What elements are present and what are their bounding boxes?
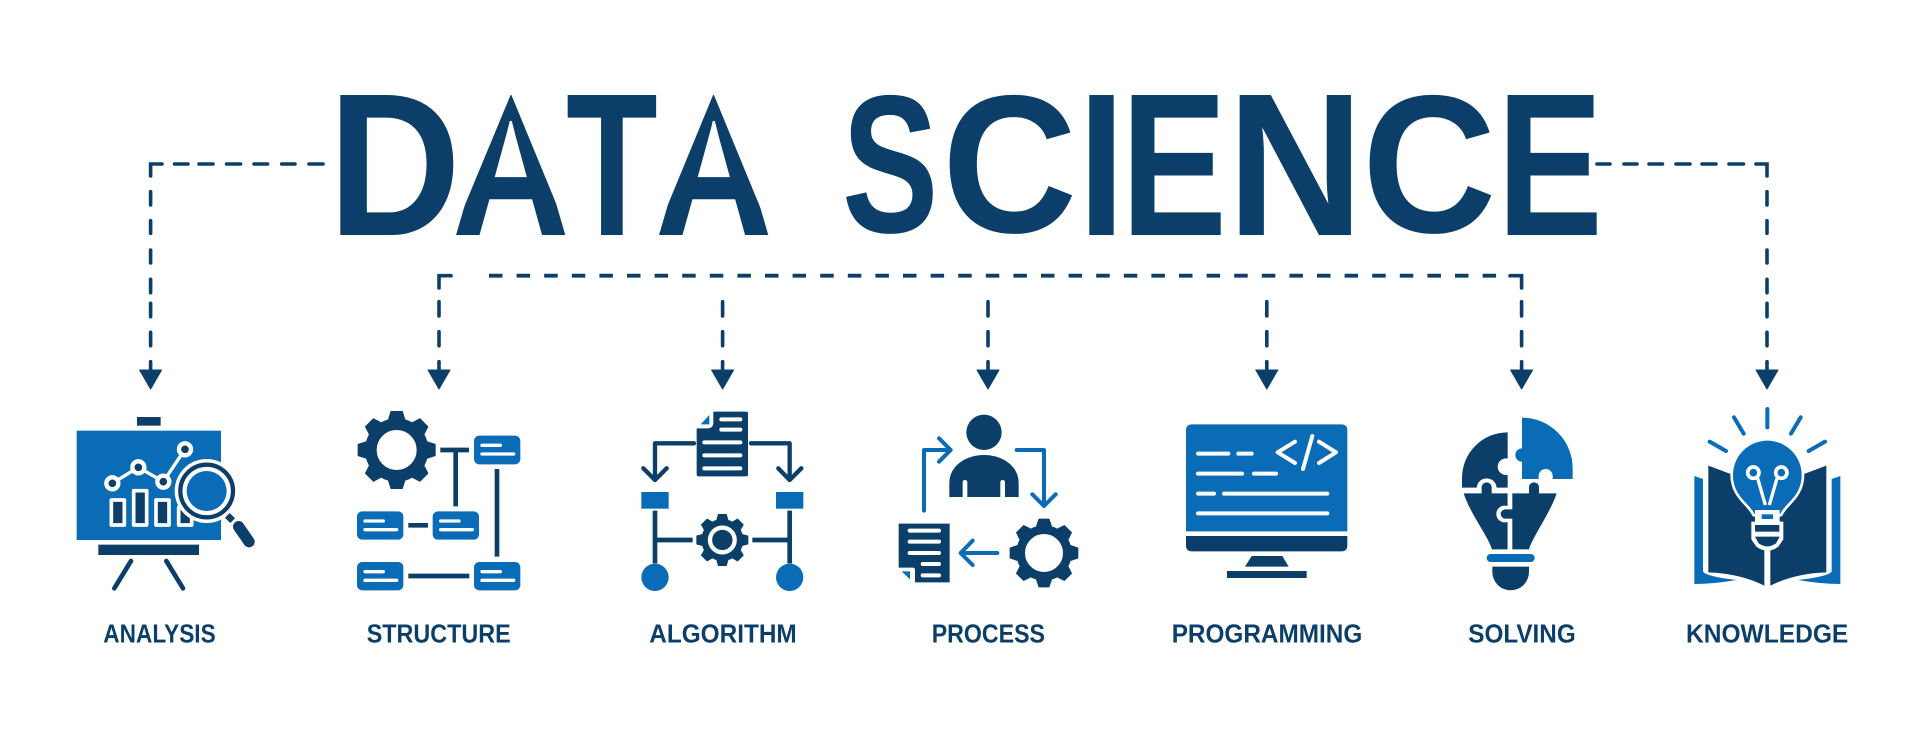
arrow: to solving bbox=[1510, 276, 1533, 389]
label: process: PROCESS bbox=[932, 618, 1045, 648]
arrow: title to knowledge bbox=[1597, 164, 1778, 389]
dashed horizontal bus bbox=[489, 274, 1500, 278]
label: structure: STRUCTURE bbox=[367, 618, 511, 648]
arrow: title to analysis bbox=[140, 164, 323, 389]
title: D bbox=[328, 52, 461, 279]
icon: solving bbox=[1462, 418, 1573, 590]
arrow: to programming bbox=[1256, 302, 1278, 389]
title: N bbox=[1227, 52, 1364, 279]
label: analysis: ANALYSIS bbox=[103, 618, 216, 648]
icon: algorithm bbox=[641, 412, 803, 591]
arrow: to algorithm bbox=[712, 302, 734, 389]
title: A bbox=[452, 52, 570, 279]
title: I bbox=[1078, 52, 1125, 279]
title: C bbox=[1362, 56, 1496, 275]
title: E bbox=[1121, 52, 1227, 279]
title: A bbox=[655, 52, 773, 279]
title bbox=[328, 52, 1603, 279]
arrow: dashed bus to structure bbox=[428, 276, 451, 389]
icon: structure bbox=[357, 411, 520, 590]
label: algorithm: ALGORITHM bbox=[649, 618, 797, 648]
title: S bbox=[842, 56, 939, 275]
label: solving: SOLVING bbox=[1468, 618, 1576, 648]
title: T bbox=[566, 52, 658, 279]
icon: knowledge bbox=[1694, 409, 1840, 587]
title: E bbox=[1497, 52, 1603, 279]
icon: programming bbox=[1186, 424, 1347, 578]
label: knowledge: KNOWLEDGE bbox=[1686, 618, 1848, 648]
icon: process bbox=[899, 415, 1078, 587]
arrow: to process bbox=[977, 302, 999, 389]
label: programming: PROGRAMMING bbox=[1172, 618, 1362, 648]
icon: analysis bbox=[77, 417, 249, 588]
title: C bbox=[942, 56, 1077, 275]
